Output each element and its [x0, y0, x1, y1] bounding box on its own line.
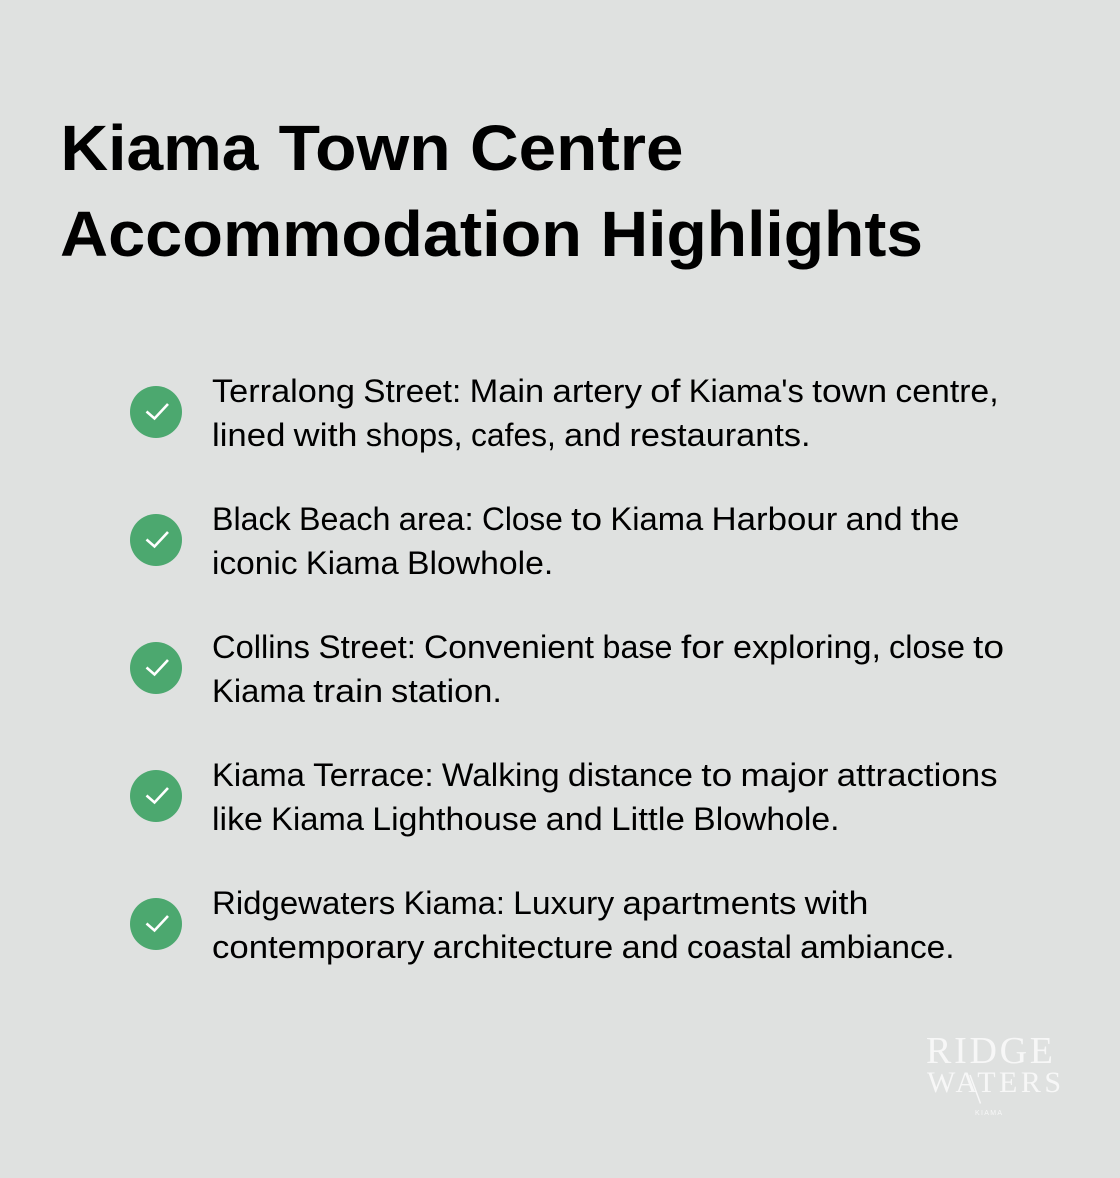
text: Terralong Street: with [293, 417, 358, 453]
text: Kiama Terrace: and [546, 801, 603, 837]
text: Ridgewaters Kiama: with [803, 885, 868, 921]
text: Kiama Terrace: Kiama [212, 757, 305, 793]
text: Collins Street: exploring, [733, 629, 881, 665]
text: Ridgewaters Kiama: apartments [622, 885, 796, 921]
text: Collins Street: close [889, 629, 965, 665]
text: Kiama Terrace [212, 757, 998, 837]
text: Terralong Street: lined [212, 417, 285, 453]
icon: check mark [130, 386, 182, 438]
title: Highlights [600, 198, 923, 270]
text: Collins Street: Kiama [212, 673, 305, 709]
text: Collins Street: for [681, 629, 724, 665]
icon: check mark [130, 514, 182, 566]
item: Black Beach area [130, 501, 959, 581]
title: Town [279, 112, 451, 184]
title: Accommodation [60, 198, 582, 270]
item: Collins Street [130, 629, 1004, 709]
title: Kiama [60, 112, 259, 184]
text: Terralong Street: Street: [363, 373, 461, 409]
text: Terralong Street: centre, [895, 373, 999, 409]
text: Black Beach area: the [911, 501, 959, 537]
text: Ridgewaters Kiama: Ridgewaters [212, 885, 395, 921]
logo: Ridge Waters Kiama: KIAMA [975, 1110, 1002, 1117]
icon: check mark [130, 770, 182, 822]
text: Ridgewaters Kiama: ambiance. [800, 929, 955, 965]
text: Kiama Terrace: major [740, 757, 829, 793]
text: Terralong Street [212, 373, 999, 453]
checklist [130, 373, 1004, 965]
text: Black Beach area: Close [482, 501, 563, 537]
text: Kiama Terrace: Kiama [271, 801, 364, 837]
text: Terralong Street: Main [470, 373, 544, 409]
item: Ridgewaters Kiama [130, 885, 955, 965]
text: Black Beach area: iconic [212, 545, 298, 581]
text: Black Beach area: Harbour [712, 501, 838, 537]
text: Ridgewaters Kiama: contemporary [212, 929, 424, 965]
text: Black Beach area: Beach [299, 501, 390, 537]
text: Collins Street: train [313, 673, 383, 709]
text: Terralong Street: Terralong [212, 373, 355, 409]
text: Collins Street: station. [391, 673, 502, 709]
text: Black Beach area: to [571, 501, 602, 537]
text: Black Beach area: Black [212, 501, 292, 537]
item: Terralong Street [130, 373, 999, 453]
text: Terralong Street: shops, [366, 417, 463, 453]
text: Terralong Street: restaurants. [630, 417, 810, 453]
text: Ridgewaters Kiama: Kiama: [404, 885, 505, 921]
icon: check mark [130, 642, 182, 694]
text: Collins Street: to [973, 629, 1004, 665]
text: Ridgewaters Kiama: architecture [433, 929, 613, 965]
text: Terralong Street: and [564, 417, 621, 453]
text: Kiama Terrace: like [212, 801, 263, 837]
text: Kiama Terrace: Terrace: [313, 757, 434, 793]
text: Black Beach area: Kiama [610, 501, 703, 537]
text: Black Beach area [212, 501, 959, 581]
title: Centre [470, 112, 684, 184]
text: Kiama Terrace: attractions [837, 757, 998, 793]
logo: Ridge Waters Kiama: RIDGE [926, 1030, 1053, 1072]
text: Terralong Street: town [812, 373, 887, 409]
text: Black Beach area: Blowhole. [407, 545, 553, 581]
icon: check mark [130, 898, 182, 950]
text: Ridgewaters Kiama [212, 885, 955, 965]
text: Terralong Street: cafes, [471, 417, 556, 453]
text: Terralong Street: Kiama's [689, 373, 804, 409]
text: Collins Street: Collins [212, 629, 310, 665]
logo: Ridge Waters Kiama: WATERS [927, 1066, 1061, 1099]
text: Ridgewaters Kiama: Luxury [513, 885, 614, 921]
text: Black Beach area: area: [399, 501, 474, 537]
text: Terralong Street: of [650, 373, 681, 409]
text: Collins Street: Convenient [424, 629, 594, 665]
text: Terralong Street: artery [552, 373, 642, 409]
logo: Ridge Waters Kiama [926, 1030, 1061, 1117]
text: Ridgewaters Kiama: and [622, 929, 679, 965]
text: Kiama Terrace: Blowhole. [693, 801, 840, 837]
text: Collins Street [212, 629, 1004, 709]
text: Kiama Terrace: Lighthouse [372, 801, 538, 837]
text: Kiama Terrace: distance [568, 757, 693, 793]
text: Collins Street: base [602, 629, 672, 665]
item: Kiama Terrace [130, 757, 998, 837]
text: Ridgewaters Kiama: coastal [687, 929, 792, 965]
text: Black Beach area: Kiama [306, 545, 399, 581]
text: Kiama Terrace: Little [611, 801, 685, 837]
text: Black Beach area: and [846, 501, 903, 537]
title [60, 112, 923, 270]
text: Kiama Terrace: to [701, 757, 732, 793]
text: Kiama Terrace: Walking [442, 757, 560, 793]
text: Collins Street: Street: [318, 629, 416, 665]
